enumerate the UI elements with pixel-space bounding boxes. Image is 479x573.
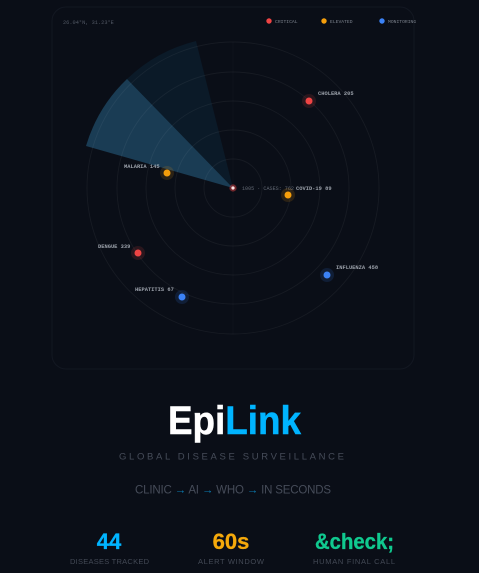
marker: hepatitis (135, 287, 189, 304)
radar rings (87, 42, 379, 334)
radar sweep trailing sector (127, 41, 233, 188)
stat: human final call: &check; (315, 529, 394, 554)
subtitle: GLOBAL DISEASE SURVEILLANCE (119, 452, 344, 462)
marker: covid-19 (281, 186, 332, 202)
stat: alert window: ALERT WINDOW (198, 557, 265, 566)
marker: dengue: DENGUE 339 (98, 244, 130, 250)
legend: critical: CRITICAL (275, 19, 298, 25)
title: EpiLink (168, 399, 302, 443)
marker: cholera (302, 91, 354, 108)
legend: monitoring (379, 18, 416, 25)
marker: malaria (124, 164, 174, 180)
tagline: CLINIC → AI → WHO → IN SECONDS (135, 484, 331, 496)
stat: human final call (313, 529, 395, 566)
legend: elevated: ELEVATED (330, 19, 353, 25)
marker: malaria: MALARIA 145 (124, 164, 160, 170)
marker: covid-19: COVID-19 89 (296, 186, 332, 192)
marker: centre scan point (229, 184, 294, 192)
stat: alert window: 60s (213, 529, 249, 554)
radar sweep bright sector (86, 79, 233, 188)
legend: elevated (321, 18, 353, 25)
coordinates readout: 26.04°N, 31.23°E (63, 20, 114, 26)
marker: centre scan point: 1005 · CASES: 762 (242, 186, 294, 192)
stat: diseases tracked (70, 529, 150, 566)
stat: diseases tracked: DISEASES TRACKED (70, 557, 150, 566)
stat: diseases tracked: 44 (97, 529, 122, 554)
marker: influenza (320, 265, 378, 282)
marker: dengue (98, 244, 145, 260)
marker: hepatitis: HEPATITIS 67 (135, 287, 174, 293)
stat: alert window (198, 529, 265, 566)
legend: critical (266, 18, 298, 25)
stat: human final call: HUMAN FINAL CALL (313, 557, 395, 566)
marker: influenza: INFLUENZA 458 (336, 265, 378, 271)
legend: monitoring: MONITORING (388, 19, 416, 25)
marker: cholera: CHOLERA 205 (318, 91, 354, 97)
panel: radar map (52, 7, 416, 369)
